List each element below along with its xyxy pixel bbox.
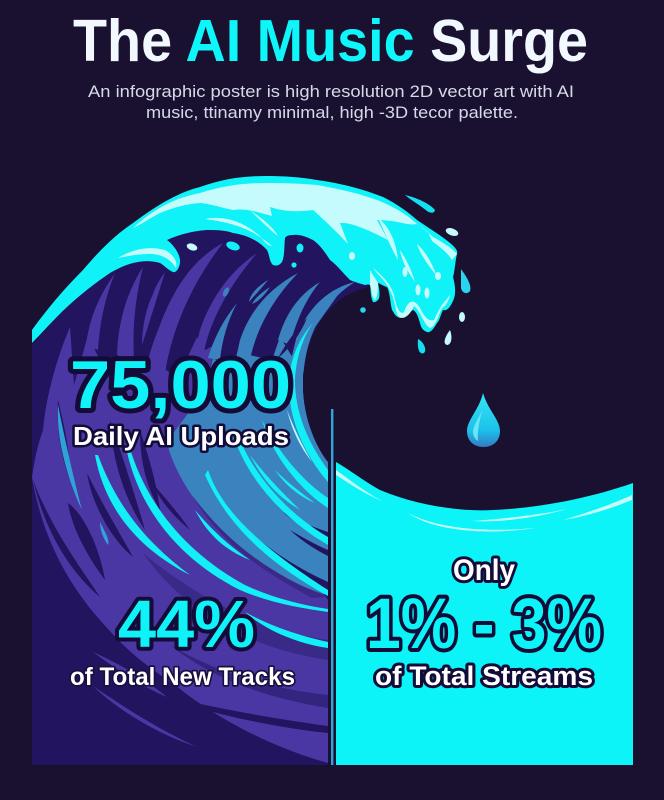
white foam on crest — [133, 183, 457, 260]
divider line — [331, 409, 333, 765]
dark slivers in blue — [156, 309, 328, 598]
cyan streaks — [58, 323, 328, 648]
label: Only: Only — [453, 554, 515, 587]
purple upper blades — [86, 243, 257, 375]
label: Daily AI Uploads: Daily AI Uploads — [73, 421, 289, 451]
stat: 44%: 44% — [118, 587, 255, 662]
panel: small cyan pool — [336, 462, 633, 765]
blue upper blades — [208, 273, 355, 372]
subtitle: music, ttinamy minimal, high -3D tecor palette. — [146, 104, 518, 122]
spray droplets — [186, 195, 470, 353]
blue mass with jagged top — [167, 292, 340, 595]
stat: 1% - 3%: 1% - 3% — [366, 585, 602, 664]
label: of Total Streams: of Total Streams — [375, 661, 593, 691]
pool highlights — [336, 470, 632, 531]
wave body — [32, 170, 372, 765]
stat: 75,000: 75,000 — [70, 347, 291, 423]
title: The AI Music Surge — [73, 8, 588, 74]
water drop icon — [467, 393, 500, 447]
label: of Total New Tracks: of Total New Tracks — [70, 663, 295, 691]
subtitle — [88, 83, 574, 122]
wave crest — [32, 176, 457, 343]
purple mass with jagged top — [32, 327, 328, 763]
bottom purple sliver — [93, 686, 197, 747]
subtitle: An infographic poster is high resolution 2D vector art with AI — [88, 83, 574, 101]
dark slivers in purple — [33, 282, 328, 733]
foam accents on crest — [118, 210, 450, 328]
wave illustration — [32, 170, 470, 765]
